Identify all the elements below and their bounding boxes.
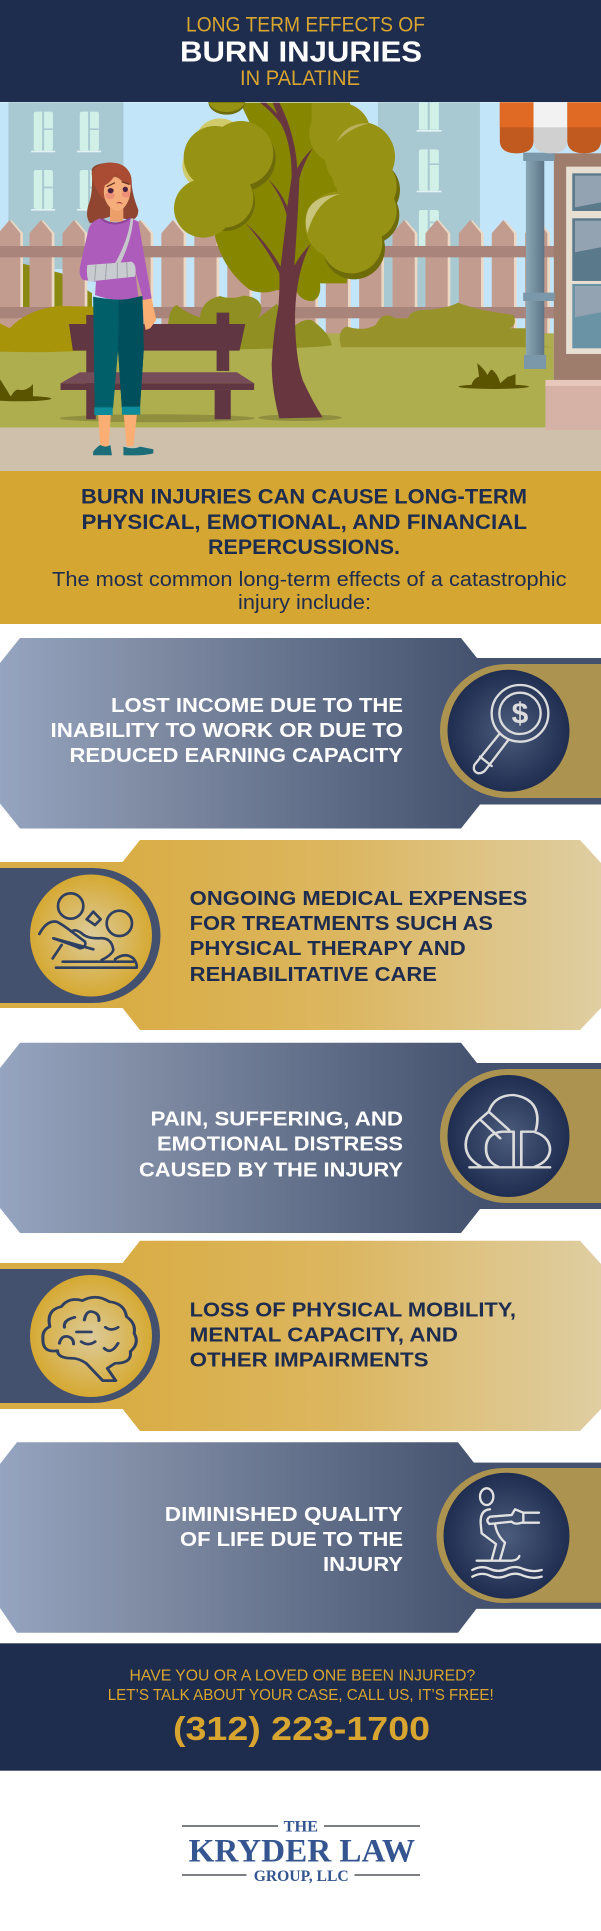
text — [165, 1503, 403, 1576]
text: LOSS OF PHYSICAL MOBILITY, — [190, 1299, 516, 1322]
scene background: sky, buildings, fence, bushes, ground — [0, 102, 601, 471]
header line: in palatine: IN PALATINE — [240, 67, 360, 90]
text: DIMINISHED QUALITY — [165, 1503, 403, 1526]
intro text — [52, 569, 566, 614]
fence — [0, 220, 556, 335]
panel: quality of life — [0, 1442, 601, 1633]
text: OF LIFE DUE TO THE — [180, 1528, 403, 1551]
text: FOR TREATMENTS SUCH AS — [190, 912, 493, 935]
intro heading: PHYSICAL, EMOTIONAL, AND FINANCIAL — [82, 511, 527, 534]
intro heading — [81, 486, 527, 559]
header line: long term effects: LONG TERM EFFECTS OF — [186, 14, 425, 36]
left building — [8, 102, 123, 269]
text: CAUSED BY THE INJURY — [139, 1159, 403, 1182]
icon: water skier — [472, 1488, 542, 1578]
storefront and bench — [61, 102, 601, 455]
call to action band — [0, 1643, 601, 1771]
icon: physical therapy — [39, 893, 137, 968]
woman's legs — [93, 296, 156, 455]
call to action text — [108, 1668, 494, 1704]
header band — [0, 0, 601, 102]
text: PHYSICAL THERAPY AND — [190, 937, 466, 960]
logo: Kryder Law Group: KRYDER LAW — [189, 1834, 415, 1870]
panel: loss of mobility — [0, 1241, 601, 1431]
text: EMOTIONAL DISTRESS — [157, 1133, 403, 1156]
text: INJURY — [323, 1553, 403, 1576]
icon: pills — [466, 1095, 550, 1167]
phone number: (312) 223-1700 — [173, 1710, 430, 1747]
grass and pavement — [0, 333, 601, 471]
woman's upper body with sling — [80, 163, 152, 300]
text: REHABILITATIVE CARE — [190, 963, 437, 986]
text: LOST INCOME DUE TO THE — [111, 694, 403, 717]
text: ONGOING MEDICAL EXPENSES — [190, 887, 527, 910]
call to action text: HAVE YOU OR A LOVED ONE BEEN INJURED? — [130, 1668, 475, 1685]
text — [139, 1108, 403, 1182]
icon: magnifying glass with dollar — [474, 685, 548, 773]
storefront — [500, 102, 601, 430]
panel: medical expenses — [0, 840, 601, 1030]
logo: Kryder Law Group: THE — [284, 1819, 318, 1836]
logo: Kryder Law Group: GROUP, LLC — [254, 1868, 349, 1885]
downpipe — [523, 153, 555, 369]
title: burn injuries: BURN INJURIES — [180, 36, 422, 68]
text: MENTAL CAPACITY, AND — [190, 1324, 458, 1347]
panel: pain and suffering — [0, 1043, 601, 1233]
right building — [378, 102, 480, 309]
intro band — [0, 471, 601, 624]
grass tufts — [0, 363, 529, 401]
text: INABILITY TO WORK OR DUE TO — [50, 719, 403, 742]
text: OTHER IMPAIRMENTS — [190, 1349, 428, 1372]
intro heading: REPERCUSSIONS. — [208, 536, 400, 559]
text: REDUCED EARNING CAPACITY — [70, 744, 403, 767]
text: PAIN, SUFFERING, AND — [150, 1108, 403, 1131]
awning — [500, 102, 601, 153]
call to action text: LET’S TALK ABOUT YOUR CASE, CALL US, IT’S FREE! — [108, 1687, 494, 1704]
illustration: park scene with injured woman — [0, 89, 601, 471]
background hedge — [0, 263, 92, 347]
intro heading: BURN INJURIES CAN CAUSE LONG-TERM — [81, 486, 527, 508]
panel: lost income — [0, 638, 601, 828]
tree with middle bush — [167, 89, 400, 421]
intro text: The most common long-term effects of a catastrophic — [52, 569, 566, 591]
icon: brain — [43, 1297, 136, 1381]
bench — [61, 313, 254, 419]
text — [50, 694, 403, 767]
intro text: injury include: — [238, 592, 371, 614]
text — [190, 887, 527, 986]
bushes — [0, 303, 554, 352]
logo: Kryder Law Group — [182, 1819, 420, 1885]
text — [190, 1299, 516, 1372]
icon: magnifying glass with dollar: $ — [512, 697, 529, 730]
